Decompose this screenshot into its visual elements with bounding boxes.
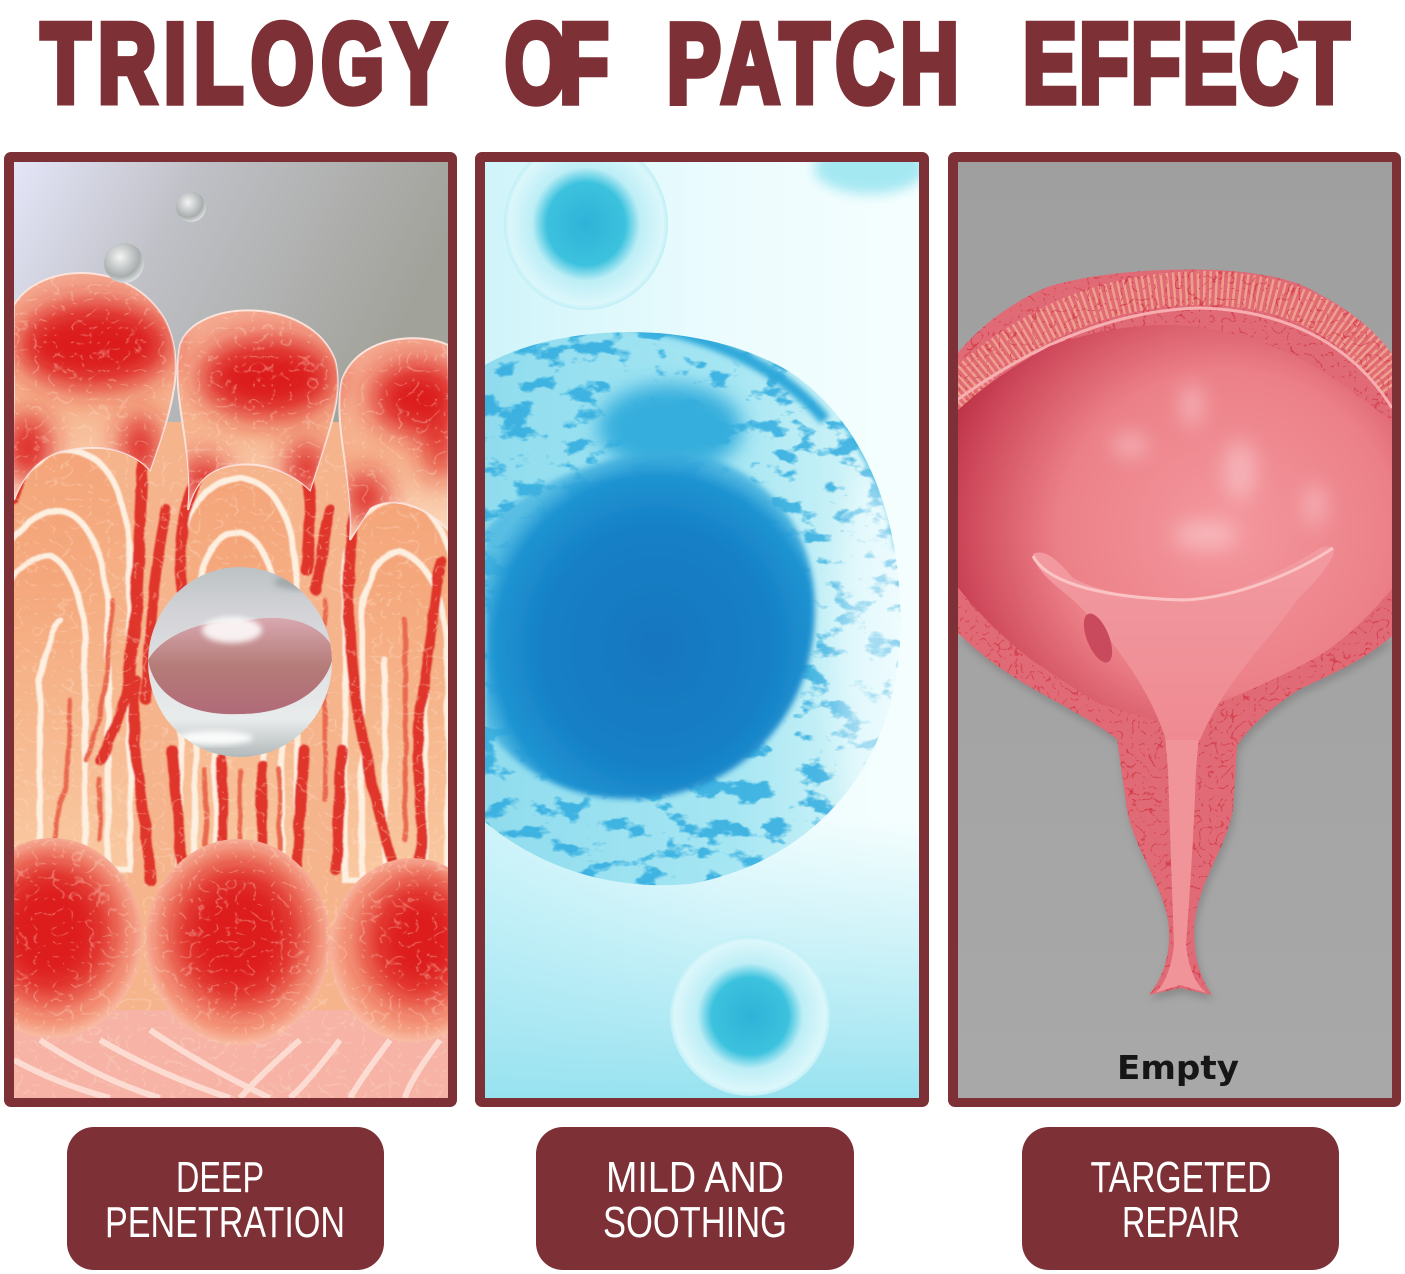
button: deep penetration (67, 1127, 384, 1270)
title: OF (505, 1, 609, 126)
panel: deep penetration image (0, 152, 494, 1107)
button: mild and soothing (536, 1127, 854, 1270)
button: deep penetration: PENETRATION (105, 1198, 345, 1247)
urethra lumen (1155, 738, 1207, 993)
bladder interior (957, 325, 1392, 736)
ureter opening (1084, 614, 1112, 662)
panel: targeted repair image (948, 152, 1401, 1107)
label: Empty: Empty (1117, 1048, 1239, 1087)
button: targeted repair: REPAIR (1122, 1198, 1240, 1247)
title: TRILOGY (41, 1, 446, 126)
button: deep penetration: DEEP (176, 1153, 264, 1202)
bottom red spheres (14, 838, 448, 1045)
trigone (1033, 546, 1334, 740)
title: PATCH (667, 1, 959, 126)
bladder shadow (959, 637, 1394, 1000)
panel: mild and soothing image (475, 138, 929, 1107)
red patches on spheres (6, 301, 464, 524)
bottom pink layers (14, 1010, 448, 1098)
arches and red stems (0, 425, 455, 880)
interior highlights (1112, 383, 1325, 549)
central bubble (148, 567, 334, 757)
large cell (485, 320, 906, 890)
surface wrinkle texture (14, 262, 448, 1098)
drop bubbles (104, 243, 144, 283)
button: mild and soothing: MILD AND (606, 1153, 784, 1202)
button: mild and soothing: SOOTHING (603, 1198, 787, 1247)
small cell top (504, 162, 668, 310)
top tissue spheres (14, 273, 448, 540)
button: targeted repair (1022, 1127, 1339, 1270)
title (41, 1, 1349, 126)
title: EFFECT (1023, 1, 1349, 126)
bladder wall (950, 262, 1398, 1002)
small cell bottom (670, 936, 830, 1096)
button: targeted repair: TARGETED (1090, 1153, 1272, 1202)
